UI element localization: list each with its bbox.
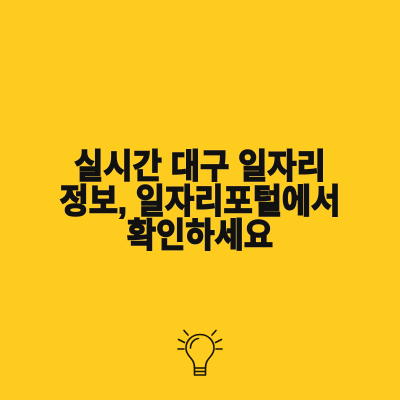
- title: 정보, 일자리포털에서: [60, 182, 340, 220]
- title: 확인하세요: [127, 217, 273, 255]
- title: 실시간 대구 일자리: [74, 148, 326, 186]
- title: [60, 148, 340, 255]
- icon: light bulb: [177, 330, 223, 376]
